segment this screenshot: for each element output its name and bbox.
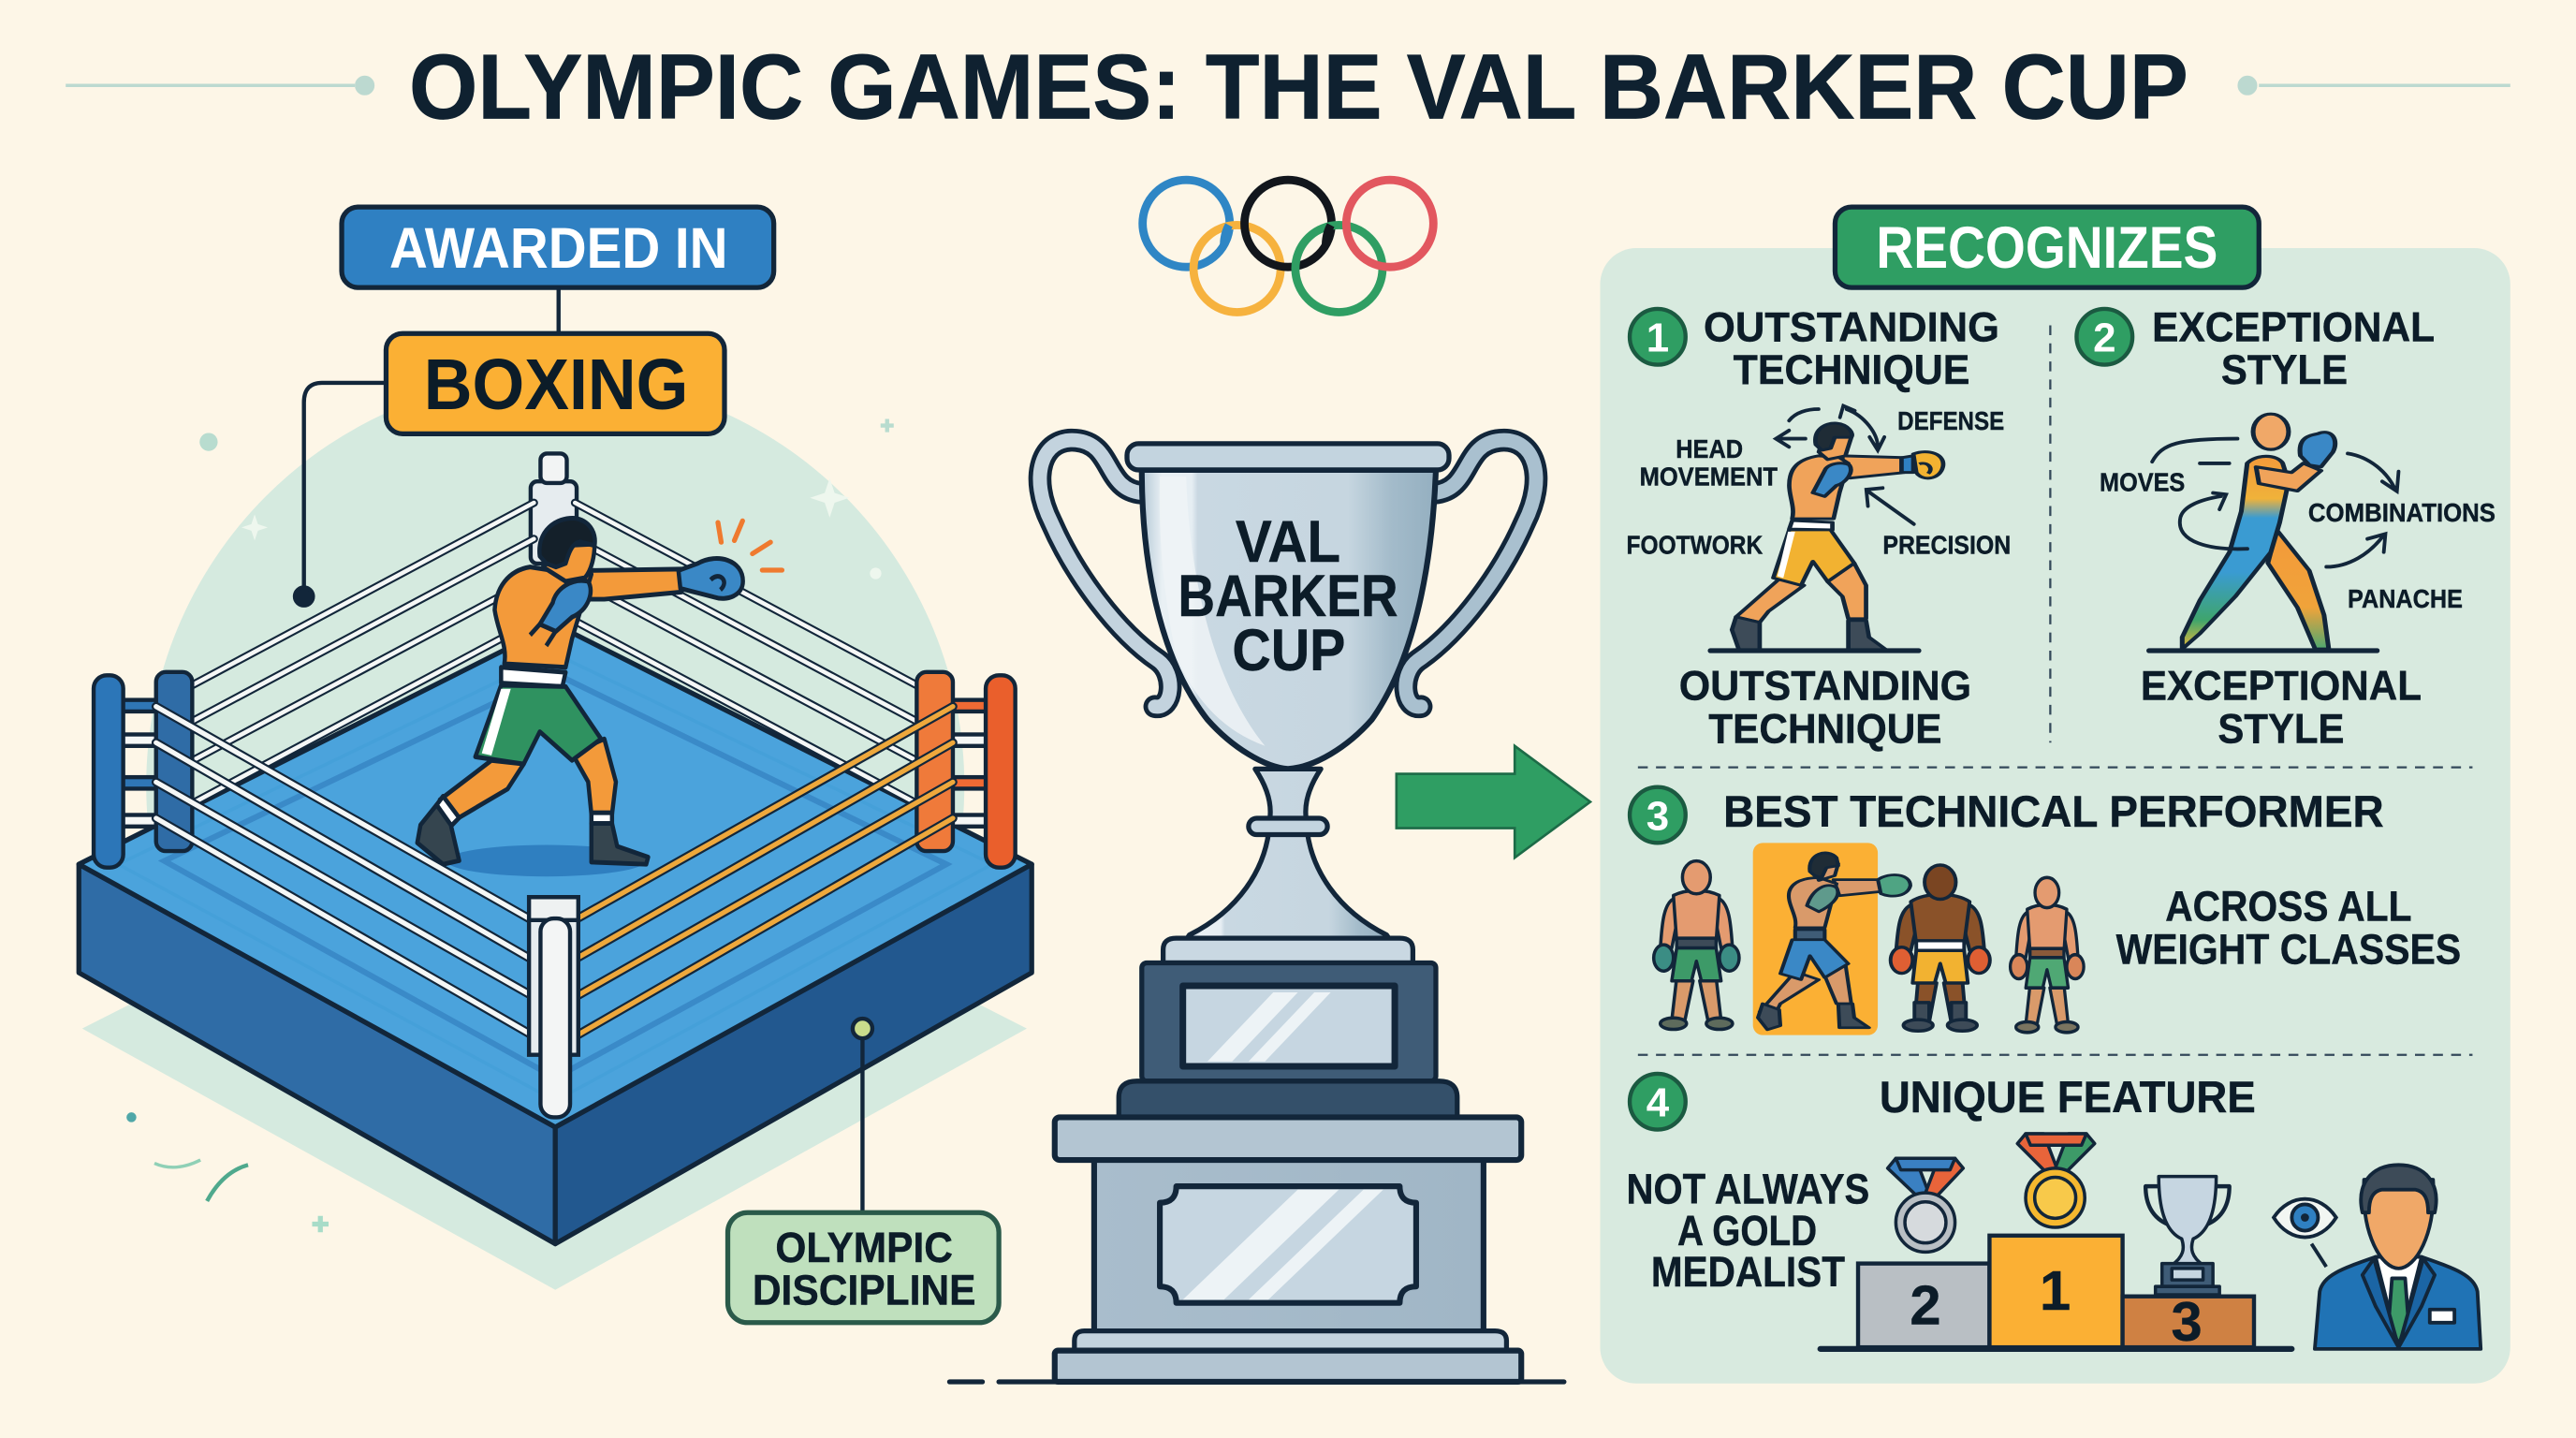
technique labels: PRECISION (1882, 530, 2011, 559)
caption 1 (1679, 663, 1971, 752)
front ropes right (572, 707, 953, 1038)
number badge 4 (1630, 1074, 1686, 1130)
number badge 1 (1630, 309, 1686, 365)
icon: eye (2274, 1199, 2336, 1267)
style labels: COMBINATIONS (2308, 498, 2496, 527)
dark step (1119, 1081, 1457, 1117)
trophy: val barker cup (1040, 440, 1536, 1382)
not always text: NOT ALWAYS (1627, 1166, 1869, 1213)
number badge 2 (2076, 309, 2132, 365)
not always text: MEDALIST (1651, 1248, 1845, 1296)
figure: highlighted punching boxer (1758, 853, 1910, 1030)
highlight box (1753, 843, 1878, 1035)
judge figure (2315, 1165, 2481, 1349)
gold medal (2017, 1134, 2095, 1227)
weight classes text: ACROSS ALL (2165, 883, 2411, 931)
trophy text: VAL (1236, 509, 1340, 575)
label: awarded in: AWARDED IN (389, 216, 728, 281)
podium numbers: 2 (1910, 1274, 1941, 1337)
small trophy (2145, 1177, 2230, 1295)
caption 2 (2141, 663, 2422, 752)
section 2: exceptional style (2076, 303, 2496, 752)
caption 1: OUTSTANDING (1679, 663, 1971, 710)
podium (1821, 1236, 2291, 1349)
impact sparks (718, 521, 782, 570)
panel: recognizes (1600, 207, 2510, 1384)
technique labels: FOOTWORK (1627, 530, 1764, 559)
label: boxing (386, 333, 724, 433)
number badge 4: 4 (1647, 1080, 1670, 1126)
label: olympic discipline: DISCIPLINE (753, 1266, 976, 1313)
silver medal (1888, 1158, 1963, 1252)
label: olympic discipline (728, 1212, 999, 1323)
icon: olympic rings (1143, 180, 1433, 312)
trophy text (1178, 509, 1398, 683)
ground line (949, 1380, 1564, 1383)
cup bowl (1142, 470, 1436, 769)
ground line 1 (1710, 649, 1919, 652)
weight classes text (2116, 883, 2461, 973)
title: OLYMPIC GAMES: THE VAL BARKER CUP (409, 35, 2188, 138)
cup rim (1127, 444, 1449, 470)
label: awarded in (342, 207, 774, 287)
heading: recognizes: RECOGNIZES (1876, 215, 2217, 281)
connector: boxing to ring (295, 383, 388, 606)
right corner post (916, 672, 1016, 868)
technique labels: MOVEMENT (1640, 462, 1778, 491)
section 1: outstanding technique (1627, 303, 2011, 752)
style labels: MOVES (2100, 468, 2185, 497)
label: boxing: BOXING (424, 345, 688, 425)
technique labels: HEAD (1676, 434, 1743, 463)
style figure (2182, 414, 2335, 649)
dark base block (1142, 962, 1436, 1081)
heading 2: STYLE (2221, 346, 2348, 393)
number badge 1: 1 (1647, 315, 1669, 361)
heading 1 (1704, 303, 1999, 393)
stem (1186, 769, 1390, 940)
figure: heavyweight boxer (1891, 865, 1990, 1031)
technique boxer figure (1732, 423, 1943, 650)
label: olympic discipline: OLYMPIC (775, 1224, 953, 1271)
trophy text: BARKER (1178, 564, 1398, 629)
boxer (417, 518, 743, 876)
back corner post (531, 453, 577, 564)
number badge 2: 2 (2093, 315, 2115, 361)
style labels (2100, 468, 2496, 613)
base step (1164, 938, 1412, 962)
caption 2: STYLE (2217, 705, 2345, 752)
small plaque (1183, 986, 1395, 1066)
mint halo (146, 414, 964, 813)
pedestal (1094, 1160, 1484, 1332)
not always text (1627, 1166, 1869, 1296)
ring mat (118, 654, 992, 1101)
back ropes (192, 503, 916, 803)
heading 4: UNIQUE FEATURE (1880, 1073, 2256, 1123)
decorative sparkles (126, 419, 894, 1232)
podium numbers: 1 (2040, 1259, 2071, 1322)
trophy text: CUP (1232, 618, 1345, 683)
technique labels (1627, 406, 2011, 559)
large plaque (1160, 1186, 1416, 1303)
technique labels: DEFENSE (1897, 406, 2004, 435)
podium numbers: 3 (2171, 1290, 2203, 1353)
not always text: A GOLD (1677, 1207, 1817, 1255)
podium numbers (1910, 1259, 2203, 1353)
weight classes text: WEIGHT CLASSES (2116, 925, 2461, 973)
connector: awarded to boxing (557, 287, 560, 333)
panel: boxing ring (79, 376, 1032, 1290)
heading 3: BEST TECHNICAL PERFORMER (1723, 787, 2384, 837)
heading 2: EXCEPTIONAL (2152, 303, 2435, 350)
ground line 2 (2149, 649, 2378, 652)
connector: olympic discipline (853, 1019, 872, 1212)
section 4: unique feature (1627, 1073, 2481, 1353)
section 3: best technical performer (1630, 787, 2461, 1035)
slab (1055, 1117, 1521, 1160)
heading 1: OUTSTANDING (1704, 303, 1999, 350)
base tiers (1075, 1331, 1506, 1351)
style labels: PANACHE (2348, 584, 2463, 613)
front ropes left (156, 707, 540, 1040)
technique arrows (1776, 405, 1914, 524)
caption 1: TECHNIQUE (1708, 705, 1942, 752)
style arrows (2152, 439, 2398, 566)
caption 2: EXCEPTIONAL (2141, 663, 2422, 710)
number badge 3 (1630, 787, 1686, 843)
figure: green shorts boxer (1654, 861, 1739, 1030)
arrow (1397, 746, 1590, 858)
front corner post (529, 897, 578, 1117)
floor shadow (82, 788, 1027, 1290)
number badge 3: 3 (1647, 793, 1669, 839)
left corner post (94, 672, 192, 868)
trophy handles (1040, 440, 1536, 707)
heading 2 (2152, 303, 2435, 393)
ring platform (79, 624, 1032, 1244)
figure: lightweight boxer (2011, 877, 2084, 1033)
heading 1: TECHNIQUE (1734, 346, 1969, 393)
